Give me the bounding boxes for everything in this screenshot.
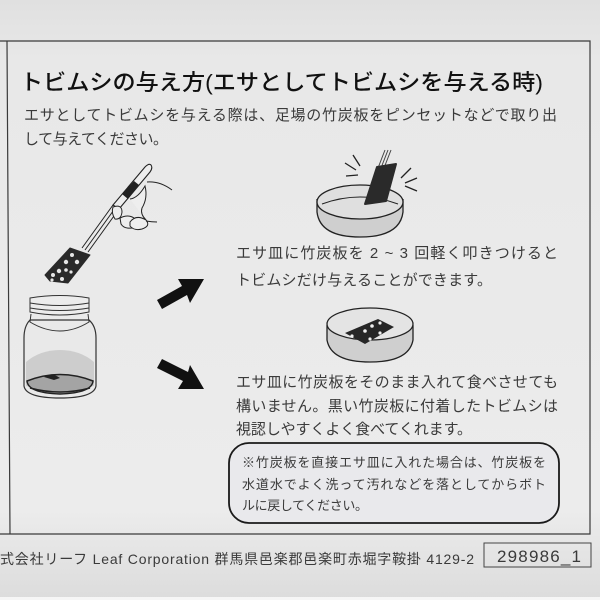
intro text: して与えてください。 xyxy=(24,131,168,148)
callout: ルに戻してください。 xyxy=(242,498,368,513)
footer company address: 式会社リーフ Leaf Corporation 群馬県邑楽郡邑楽町赤堀字鞍掛 4129-2 xyxy=(0,551,474,567)
hand xyxy=(112,182,172,230)
intro text xyxy=(24,107,557,148)
text: tapping instructions: エサ皿に竹炭板を 2 ~ 3 回軽く叩きつけると xyxy=(236,245,558,262)
charcoal plate xyxy=(45,248,90,283)
illustration: tapping plate on dish xyxy=(317,150,417,237)
tweezers xyxy=(82,164,152,252)
callout xyxy=(229,443,559,523)
illustration: plate placed in dish xyxy=(327,308,413,362)
title: トビムシの与え方(エサとしてトビムシを与える時) xyxy=(20,70,543,95)
callout: ※竹炭板を直接エサ皿に入れた場合は、竹炭板を xyxy=(242,455,546,470)
text: placing instructions: 構いません。黒い竹炭板に付着したトビムシは xyxy=(236,398,558,415)
text: tapping instructions xyxy=(236,245,558,289)
intro text: エサとしてトビムシを与える際は、足場の竹炭板をピンセットなどで取り出 xyxy=(24,107,557,124)
text: placing instructions: 視認しやすくよく食べてくれます。 xyxy=(236,421,472,438)
arrow: down-right xyxy=(157,359,204,389)
text: placing instructions xyxy=(236,374,558,438)
illustration: jar with substrate xyxy=(24,296,96,398)
product code box xyxy=(484,543,591,567)
illustration: hand with tweezers holding charcoal plate xyxy=(45,164,172,283)
product code box: 298986_1 xyxy=(497,547,581,566)
text: placing instructions: エサ皿に竹炭板をそのまま入れて食べさせても xyxy=(236,374,558,391)
arrow: up-right xyxy=(157,279,204,309)
text: tapping instructions: トビムシだけ与えることができます。 xyxy=(236,272,492,289)
callout: 水道水でよく洗って汚れなどを落としてからボト xyxy=(242,477,546,492)
